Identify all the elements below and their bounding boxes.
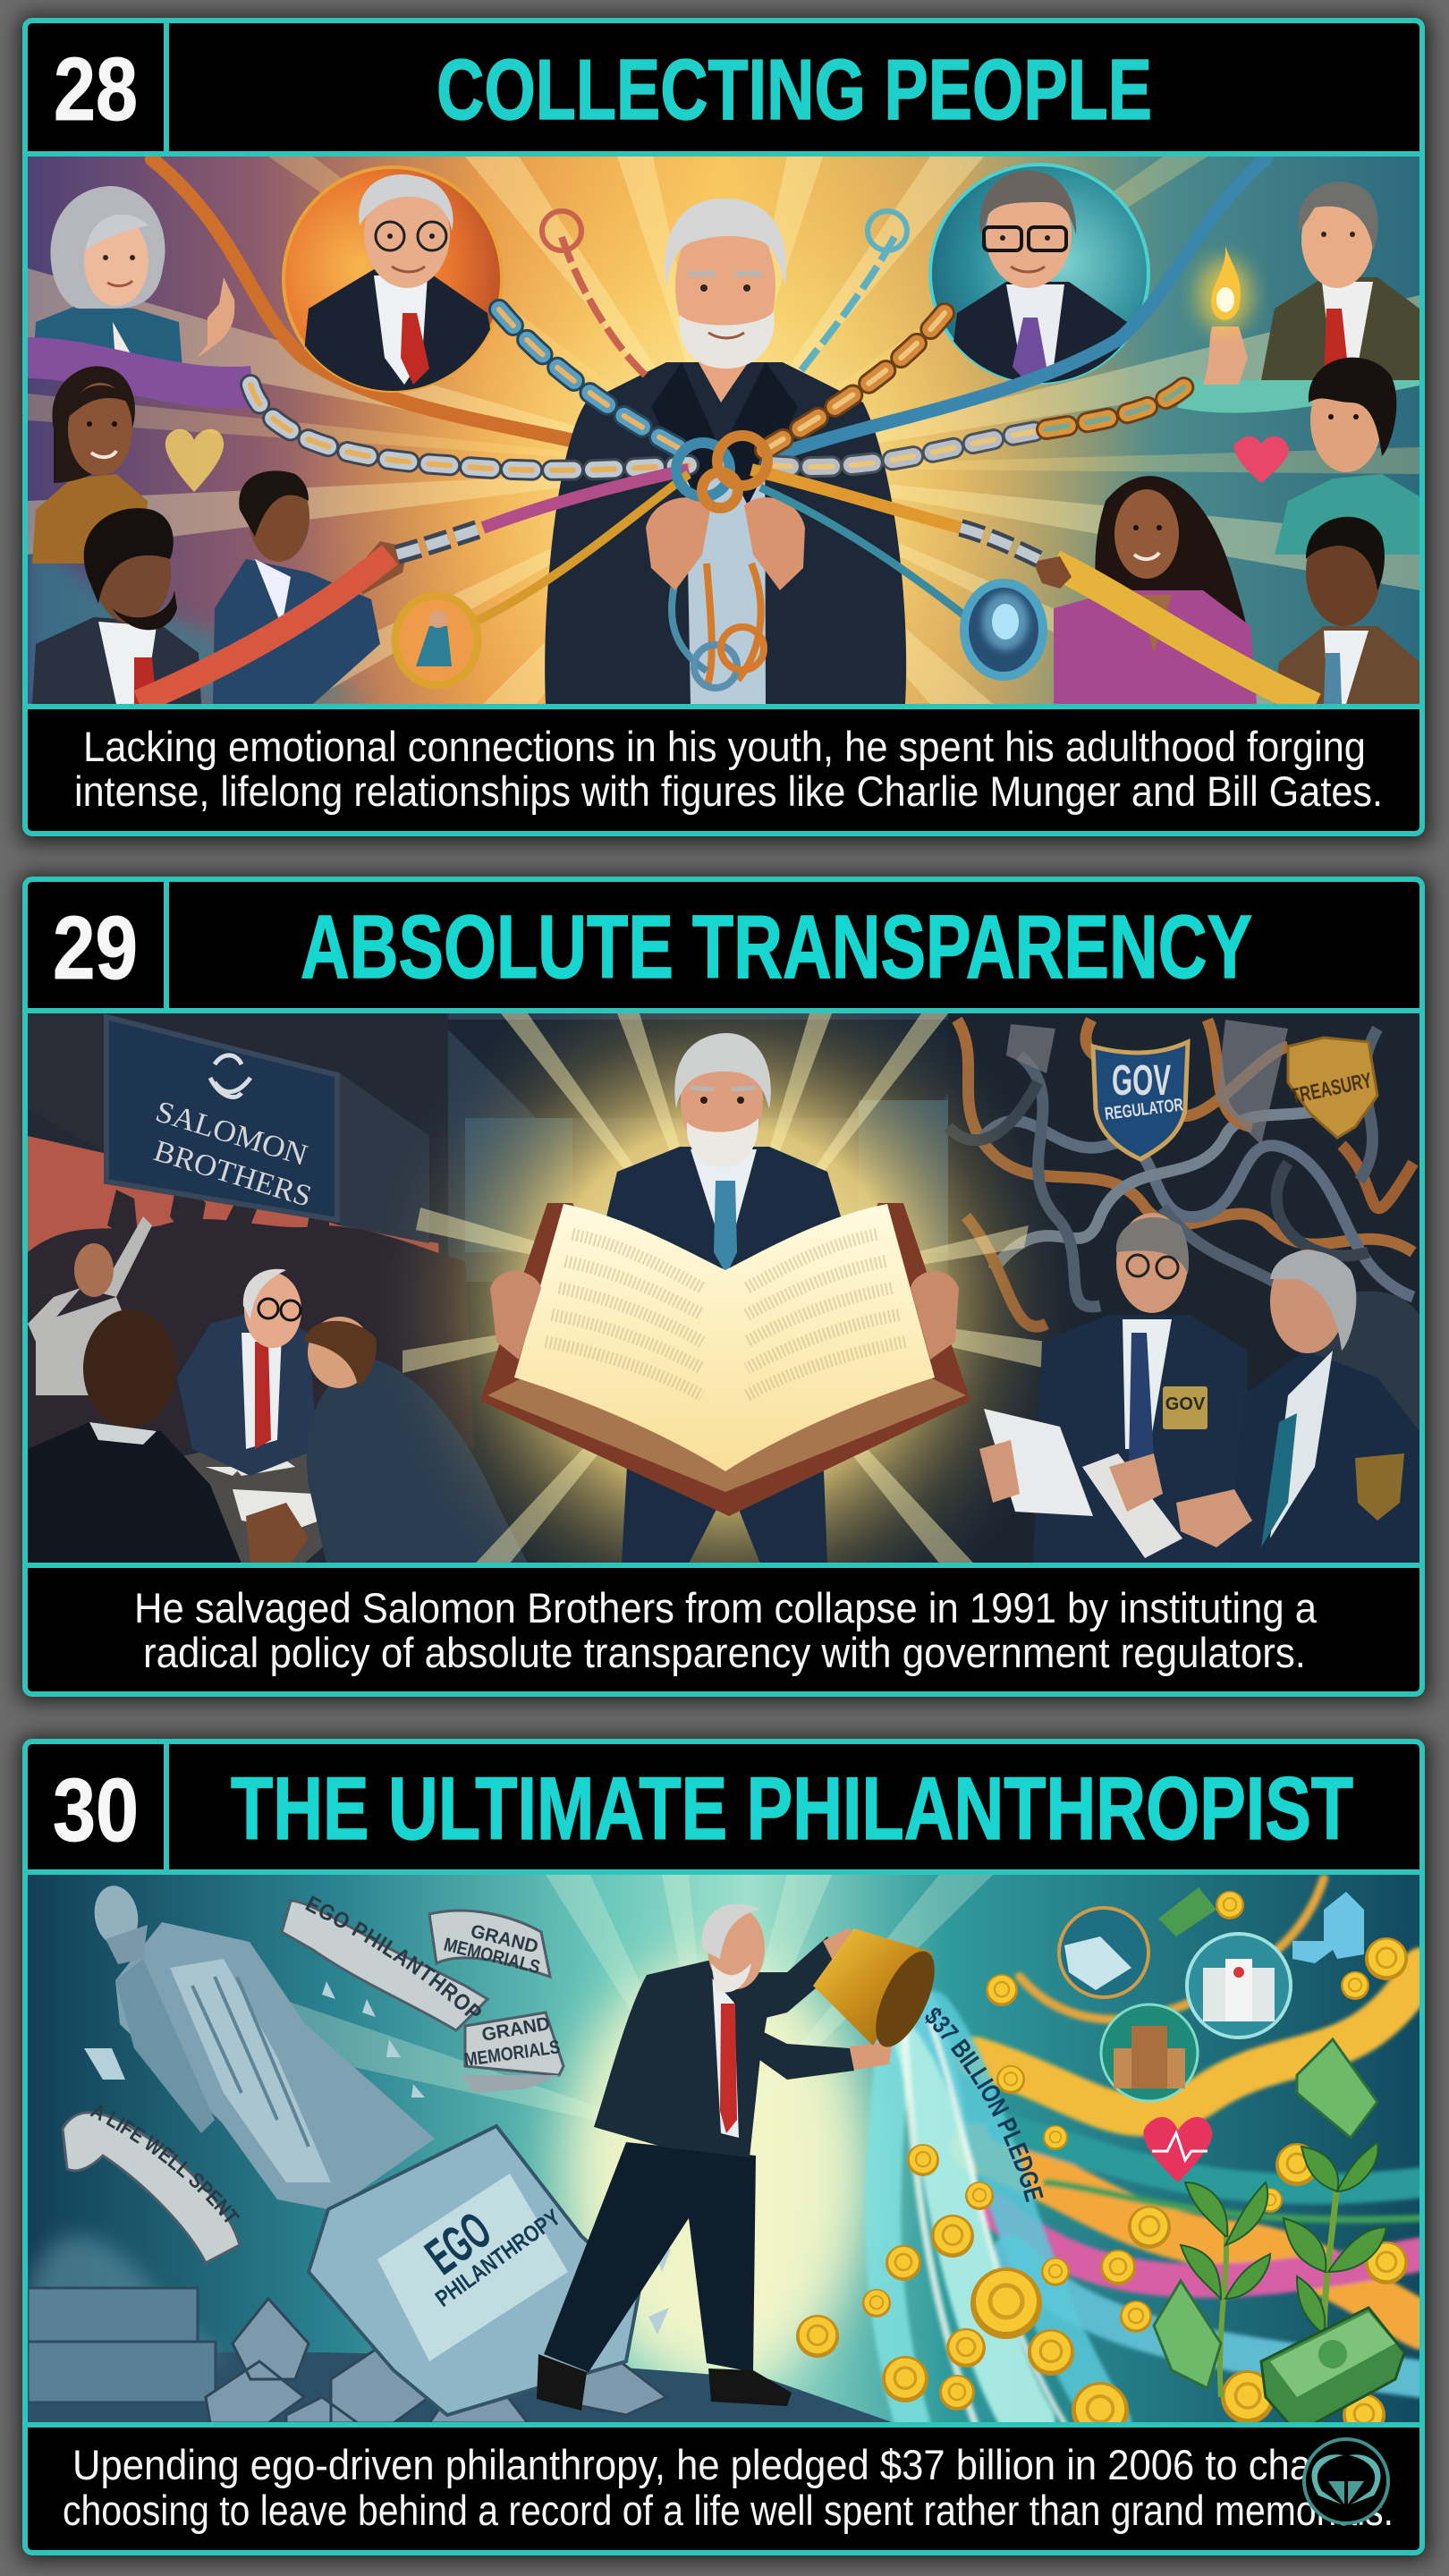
banner: a life well spent: A LIFE WELL SPENT [89, 2105, 240, 2223]
rubble [206, 2299, 666, 2423]
icon: flame [1198, 246, 1251, 331]
falling fragments [84, 1981, 671, 2334]
person: woman right [1054, 476, 1257, 704]
bubble: hospital [1187, 1934, 1291, 2038]
banner: grand memorials top: GRAND [469, 1921, 540, 1957]
banner: grand memorials lower: MEMORIALS [462, 2037, 562, 2071]
icon: heart with pulse [1143, 2117, 1212, 2182]
number 28: 28 [54, 39, 138, 140]
ribbon: gold [1054, 564, 1315, 707]
person: woman left middle [32, 366, 148, 564]
pedestal: EGO [415, 2201, 502, 2286]
banner: grand memorials top: MEMORIALS [442, 1935, 542, 1978]
broken wall [28, 2288, 216, 2402]
icon: yellow heart [165, 429, 224, 492]
portrait: Bill Gates [930, 165, 1148, 385]
banner: grand memorials lower: GRAND [480, 2013, 552, 2046]
badge: Treasury [1288, 1038, 1377, 1138]
figure: man from behind [28, 1309, 309, 1563]
chain: lower left [397, 470, 689, 626]
cash: stack [1154, 2281, 1404, 2433]
caption: He salvaged Salomon Brothers from collapse in 1991 by instituting a [134, 1584, 1318, 1631]
badge: GOV regulator: REGULATOR [1104, 1095, 1184, 1124]
banner: ego philanthropy: EGO PHILANTHROPY [305, 1895, 481, 2016]
cash note right [1297, 2039, 1377, 2138]
banner: ego philanthropy [280, 1895, 490, 2032]
right side tangled ropes [948, 1013, 1422, 1563]
icon: pink heart [1233, 436, 1289, 483]
left trading floor [28, 1013, 474, 1563]
ground [28, 2352, 894, 2423]
figure: treasury official [1176, 1250, 1419, 1563]
ribbon: purple [28, 358, 252, 387]
badge: GOV regulator: GOV [1112, 1057, 1171, 1105]
knot [676, 436, 767, 508]
banner: grand memorials lower [461, 2012, 564, 2093]
caption: Lacking emotional connections in his youth, he spent his adulthood forging [83, 723, 1366, 770]
table with papers [174, 1431, 394, 1563]
caption: Upending ego-driven philanthropy, he pledged $37 billion in 2006 to charity, [72, 2441, 1371, 2488]
hands [646, 497, 711, 590]
chain: lower right [751, 470, 1044, 631]
caption [134, 1584, 1318, 1676]
label: pledge on stream: $37 BILLION PLEDGE [925, 2007, 1044, 2202]
ribbon: blue swoosh [769, 159, 1266, 458]
number 29: 29 [53, 898, 138, 998]
chain: orange upper right [751, 313, 945, 458]
figure: bent-over man [304, 1317, 528, 1563]
chain: right [769, 380, 1191, 467]
caption [63, 2441, 1394, 2534]
caption [74, 723, 1383, 815]
ribbon: orange swoosh [145, 157, 572, 447]
hands on book [490, 1271, 541, 1360]
illustration: people linked by chains [28, 157, 1422, 707]
panel frame [25, 21, 1422, 834]
figure: central man with book [606, 1033, 841, 1563]
sign: Salomon Brothers: SALOMON [152, 1095, 311, 1173]
loose chains [542, 211, 907, 376]
banner: a life well spent [61, 2105, 242, 2265]
pedestal: PHILANTHROPY [430, 2204, 565, 2312]
plant left [1181, 2182, 1270, 2397]
banner: grand memorials top [429, 1911, 550, 1978]
bubble: university [1101, 2004, 1198, 2101]
sign: Salomon Brothers: BROTHERS [150, 1134, 316, 1214]
person: woman top left [32, 186, 234, 380]
sign: Salomon Brothers [106, 1017, 337, 1220]
bubble: rubble [1059, 1908, 1148, 1997]
panel frame [25, 879, 1422, 1694]
person: man right middle [1275, 358, 1419, 555]
illustration: book of transparency [28, 948, 1422, 1664]
cash note top [1158, 1887, 1216, 1936]
person: man bottom right [1275, 517, 1419, 704]
portrait: Charlie Munger [284, 167, 502, 394]
bucket [813, 1928, 946, 2055]
person: man top right [1203, 182, 1419, 385]
figure: older man in red tie [177, 1269, 318, 1476]
plant right [1284, 2142, 1386, 2343]
figure: trader with raised arm [28, 1216, 152, 1395]
hand grabbing gold ribbon [1033, 556, 1072, 589]
chain: blue upper left [499, 309, 694, 456]
panel frame [25, 1741, 1422, 2553]
ring: light bulb [964, 583, 1043, 676]
person: man in blue suit [213, 470, 408, 704]
open book [480, 1203, 970, 1516]
ribbon: red [139, 555, 390, 702]
logo badge [1304, 2439, 1388, 2523]
icon: buildings [1292, 1892, 1364, 1963]
badge: Treasury: TREASURY [1289, 1068, 1374, 1109]
person: man bottom left [32, 508, 201, 704]
panel: absolute transparency [20, 875, 1429, 1701]
number 30: 30 [53, 1760, 139, 1860]
panel: collecting people [20, 16, 1429, 843]
chain: left gray [250, 385, 689, 470]
ribbon: teal [1181, 369, 1422, 397]
badge: GOV regulator [1093, 1042, 1188, 1159]
person: central man [545, 199, 906, 704]
water stream [883, 2012, 1109, 2423]
caption: radical policy of absolute transparency with government regulators. [143, 1629, 1306, 1676]
paper and documents [979, 1409, 1182, 1558]
figure: man pouring [537, 1904, 893, 2411]
heading: collecting people: COLLECTING PEOPLE [436, 42, 1152, 138]
figure: regulator with glasses [1033, 1213, 1248, 1563]
pedestal [309, 2126, 640, 2415]
figure: regulator with glasses: GOV [1165, 1394, 1206, 1414]
colourful money streams [975, 1878, 1422, 2379]
glow [368, 948, 1083, 1664]
statue falling [89, 1882, 435, 2210]
ring: portrait medallion [395, 596, 478, 685]
coins [796, 1891, 1408, 2439]
